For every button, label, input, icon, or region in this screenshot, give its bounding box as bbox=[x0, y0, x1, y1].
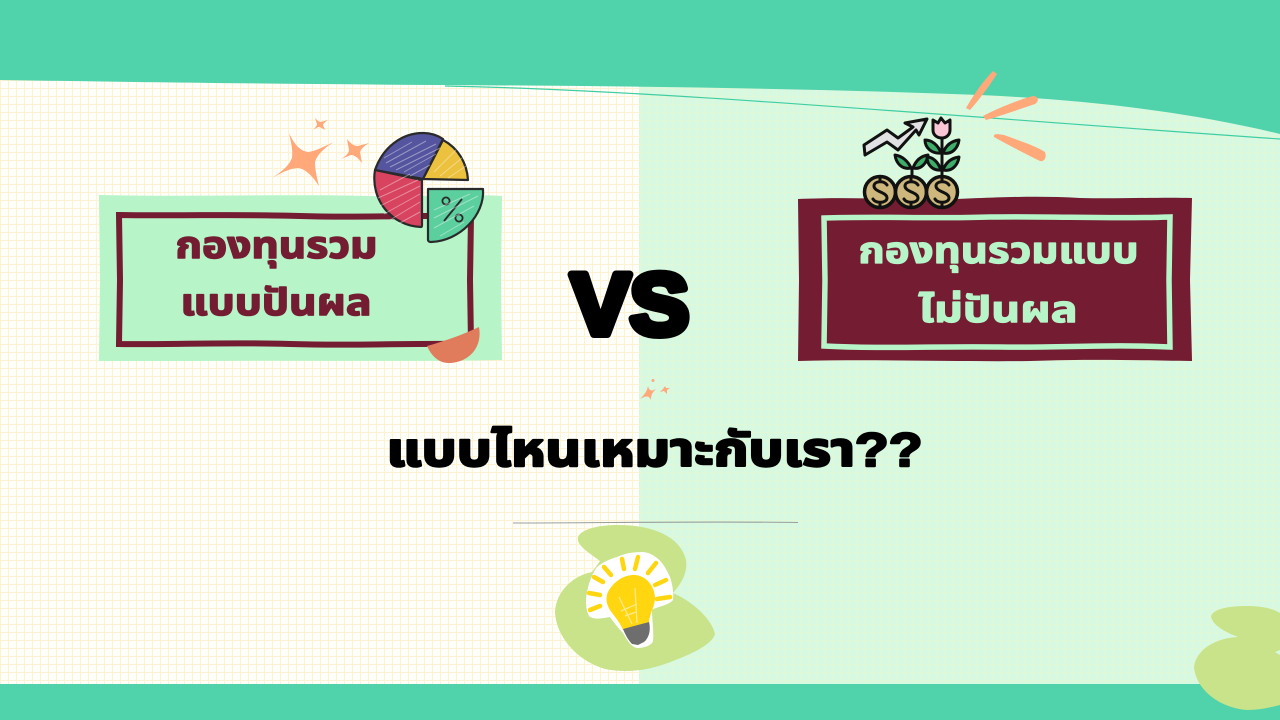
purple slice bbox=[375, 133, 443, 179]
small sparkles bbox=[640, 379, 670, 400]
card heading: กองทุนรวมแบบ bbox=[858, 230, 1138, 272]
panel: non-dividend fund card bbox=[798, 197, 1192, 361]
card border bbox=[119, 215, 471, 345]
hatching on pie bbox=[378, 141, 478, 236]
filament bbox=[619, 588, 637, 624]
coins bbox=[864, 176, 958, 208]
thin divider line bbox=[513, 522, 798, 523]
orange half circle bbox=[427, 327, 480, 363]
green percent slice bbox=[428, 189, 483, 242]
card background bbox=[99, 195, 502, 361]
red slice bbox=[374, 170, 422, 227]
panel: right background grid bbox=[639, 0, 1280, 720]
panel: left background grid bbox=[0, 0, 640, 720]
orange accent strokes bbox=[966, 71, 1046, 161]
bottom band bbox=[0, 684, 1280, 720]
bulb base bbox=[623, 622, 650, 645]
stems bbox=[912, 138, 942, 178]
card subheading: ไม่ปันผล bbox=[918, 289, 1078, 330]
tulip bbox=[933, 118, 950, 138]
panel: dividend fund card bbox=[99, 195, 502, 363]
green blob behind bulb bbox=[555, 525, 715, 671]
card heading: กองทุนรวม bbox=[176, 225, 378, 268]
thin curved line bbox=[445, 86, 1280, 139]
leaves bbox=[895, 140, 959, 170]
white sticker outline bbox=[586, 552, 673, 648]
percent sign bbox=[442, 197, 463, 222]
icon: light bulb bbox=[586, 552, 673, 648]
icon: money growth plants bbox=[864, 118, 959, 208]
rays bbox=[589, 557, 670, 610]
card subheading: แบบปันผล bbox=[180, 282, 372, 323]
yellow slice bbox=[423, 140, 468, 180]
top curved band bbox=[0, 0, 1280, 134]
card border bbox=[824, 217, 1170, 347]
sparkles: left card bbox=[272, 118, 369, 186]
dollar signs bbox=[873, 177, 949, 207]
VS label: VS bbox=[571, 257, 689, 353]
bulb glass bbox=[606, 575, 655, 630]
card background bbox=[798, 197, 1192, 361]
icon: pie chart bbox=[374, 133, 483, 242]
question heading: แบบไหนเหมาะกับเรา?? bbox=[386, 423, 922, 476]
growth arrow bbox=[864, 119, 927, 155]
green blob bottom right bbox=[1194, 606, 1280, 710]
